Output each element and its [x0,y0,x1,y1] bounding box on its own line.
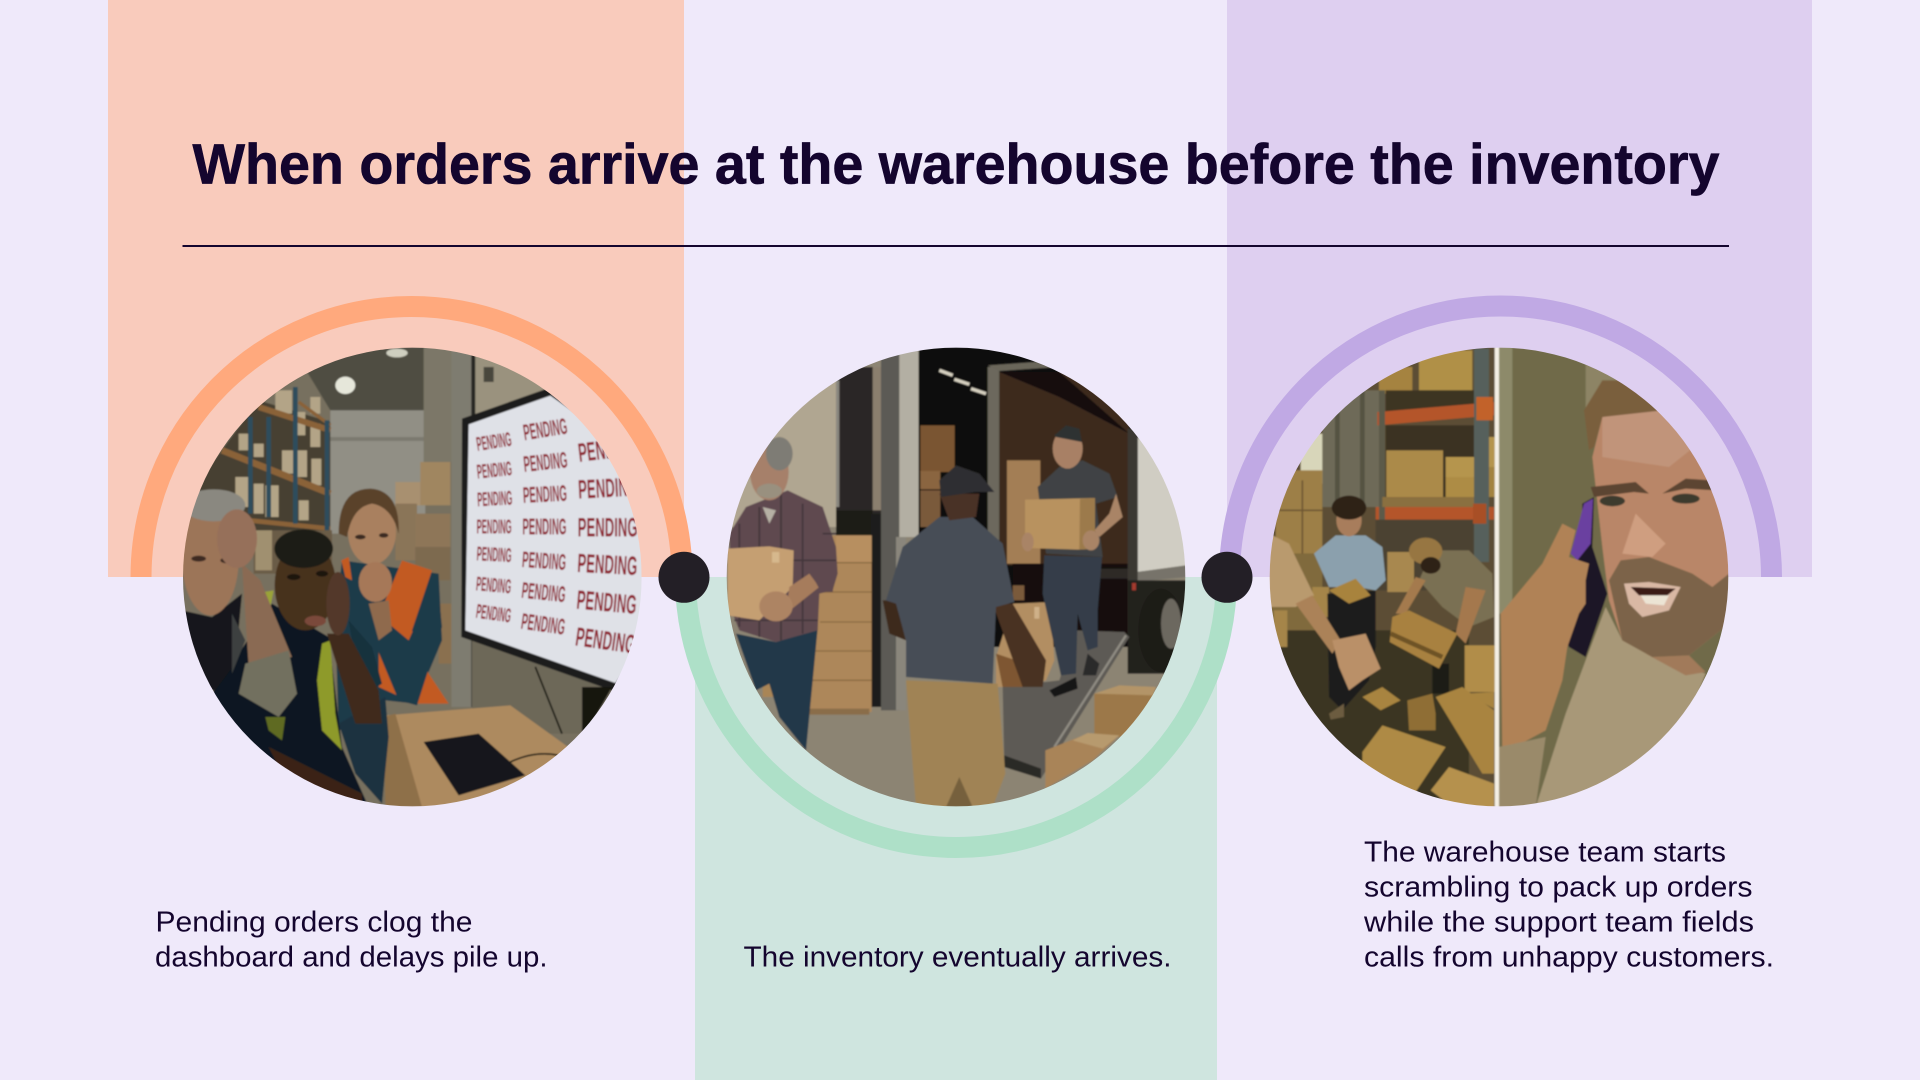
photo: worried staff at pending dashboard [182,347,642,807]
photo: worried staff at pending dashboard: PENDING [475,601,512,627]
photo: worried staff at pending dashboard: PENDING [475,429,513,456]
arc: peach ring [141,306,682,577]
connector dot: step one to step two [658,552,710,603]
caption: step three: The warehouse team starts [1364,837,1726,869]
arc: green ring [686,577,1226,848]
photo: worried staff at pending dashboard: PENDING [578,512,638,542]
photo: worried staff at pending dashboard: PENDING [476,458,513,484]
connector dot: step two to step three [1202,552,1252,603]
photo: worried staff at pending dashboard: PENDING [574,622,637,660]
photo: worried staff at pending dashboard: PENDING [522,447,569,477]
title divider rule [182,245,1729,247]
photo: worried staff at pending dashboard: PENDING [521,546,567,575]
panel: purple step background [1227,0,1812,577]
caption: step one: dashboard and delays pile up. [155,942,548,974]
photo: worried staff at pending dashboard: PENDING [577,548,638,581]
photo: worried staff at pending dashboard: PENDING [521,413,569,445]
photo: worried staff at pending dashboard: PENDING [576,431,640,468]
caption: step three: calls from unhappy customers. [1364,942,1774,974]
photo: worried staff at pending dashboard: PENDING [575,585,638,620]
caption: step two: The inventory eventually arrives. [744,942,1172,974]
photo: worried staff at pending dashboard: PENDING [522,480,568,508]
photo: worried staff at pending dashboard: PENDING [520,577,567,607]
photo: worried staff at pending dashboard: PENDING [475,573,512,598]
caption: step three [1363,837,1774,974]
arc: purple ring [1230,306,1772,577]
photo: worried staff at pending dashboard: PENDING [522,514,566,540]
photo: worried staff at pending dashboard: PENDING [477,517,512,539]
caption: step one: Pending orders clog the [156,907,473,939]
title: When orders arrive at the warehouse before the inventory [192,132,1720,196]
caption: step three: scrambling to pack up orders [1364,872,1752,904]
photo: worried staff at pending dashboard: PENDING [477,488,513,511]
photo: warehouse scramble and angry caller split image [1269,347,1729,807]
photo: worried staff at pending dashboard: PENDING [577,472,639,505]
caption: step one [155,907,548,974]
panel: peach step background [108,0,684,577]
photo: workers unloading boxes from truck [726,347,1186,807]
photo: worried staff at pending dashboard: PENDING [476,543,512,567]
photo: worried staff at pending dashboard: PENDING [520,608,567,640]
caption: step three: while the support team fields [1363,907,1754,939]
panel: green step background [695,577,1217,1080]
